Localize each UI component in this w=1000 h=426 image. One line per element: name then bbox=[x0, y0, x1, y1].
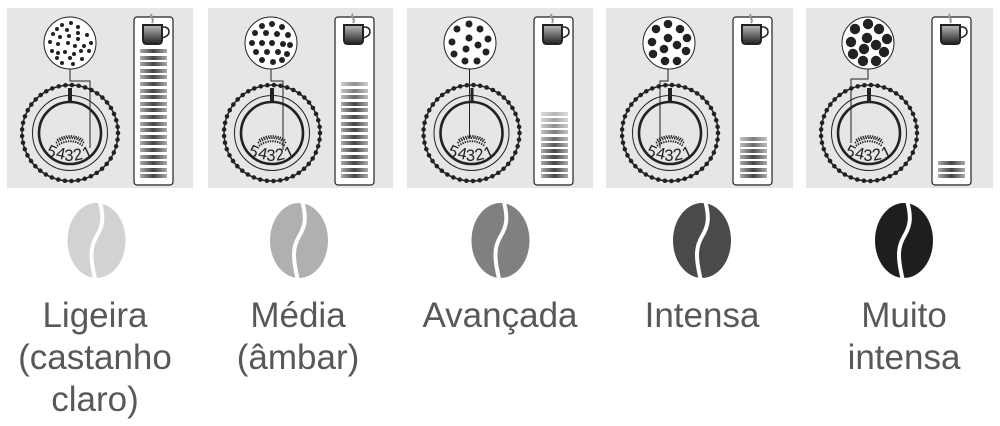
grind circle bbox=[44, 17, 96, 69]
label: media: Média bbox=[250, 296, 346, 335]
dial: 3 bbox=[466, 147, 475, 165]
dial: 4 bbox=[853, 144, 866, 164]
dial: 2 bbox=[871, 145, 883, 165]
icon: very intense bean bbox=[875, 200, 933, 280]
icon: medium bean bbox=[270, 200, 328, 280]
panel: ligeira grind and level bbox=[7, 8, 193, 188]
grind circle bbox=[444, 17, 496, 69]
dial: 2 bbox=[72, 145, 84, 165]
dial: 5 bbox=[44, 142, 60, 162]
icon: intense bean bbox=[673, 200, 731, 280]
dial bbox=[224, 85, 320, 181]
pointer line bbox=[70, 69, 90, 148]
grind circle bbox=[842, 17, 894, 69]
dial: 1 bbox=[481, 143, 497, 163]
panel: intensa grind and level bbox=[606, 8, 793, 188]
dial bbox=[622, 85, 718, 181]
dial: 2 bbox=[274, 145, 286, 165]
label: intensa: Intensa bbox=[645, 296, 760, 335]
dial: 1 bbox=[679, 143, 695, 163]
grind circle bbox=[245, 17, 297, 69]
dial: 1 bbox=[878, 143, 894, 163]
icon: advanced bean bbox=[472, 200, 530, 280]
label: ligeira: Ligeira bbox=[42, 296, 148, 335]
dial: 2 bbox=[473, 145, 486, 165]
pointer line bbox=[271, 69, 283, 150]
panel: muito intensa grind and level bbox=[806, 8, 993, 188]
dial bbox=[22, 85, 118, 181]
dial: 3 bbox=[664, 147, 674, 165]
icon: light bean bbox=[68, 200, 126, 280]
level gauge bbox=[733, 14, 772, 185]
level gauge bbox=[932, 14, 971, 185]
dial bbox=[821, 85, 917, 181]
label: ligeira: (castanho bbox=[18, 338, 172, 377]
dial: 3 bbox=[64, 147, 74, 165]
pointer line bbox=[660, 69, 668, 148]
level gauge bbox=[335, 14, 374, 185]
label: avancada: Avançada bbox=[422, 296, 578, 335]
dial: 5 bbox=[644, 142, 660, 162]
level gauge bbox=[134, 14, 173, 185]
level gauge bbox=[534, 14, 573, 185]
pointer line bbox=[851, 69, 868, 143]
dial bbox=[424, 85, 520, 181]
panel: avancada grind and level bbox=[407, 8, 593, 188]
dial: 3 bbox=[266, 147, 276, 165]
dial: 5 bbox=[843, 142, 859, 162]
dial: 3 bbox=[863, 147, 873, 165]
dial: 5 bbox=[445, 142, 461, 162]
dial: 4 bbox=[256, 144, 269, 164]
grind circle bbox=[643, 17, 695, 69]
panel: media grind and level bbox=[208, 8, 393, 188]
dial: 2 bbox=[672, 145, 684, 165]
label: muito intensa: Muito bbox=[861, 296, 947, 335]
pointer line bbox=[468, 69, 470, 138]
dial: 4 bbox=[54, 144, 67, 164]
dial: 1 bbox=[79, 143, 95, 163]
dial: 1 bbox=[281, 143, 297, 163]
dial: 4 bbox=[654, 144, 667, 164]
dial: 4 bbox=[456, 144, 469, 164]
label: media: (âmbar) bbox=[237, 338, 359, 377]
dial: 5 bbox=[246, 142, 262, 162]
label: muito intensa: intensa bbox=[848, 338, 961, 377]
label: ligeira: claro) bbox=[51, 380, 139, 419]
